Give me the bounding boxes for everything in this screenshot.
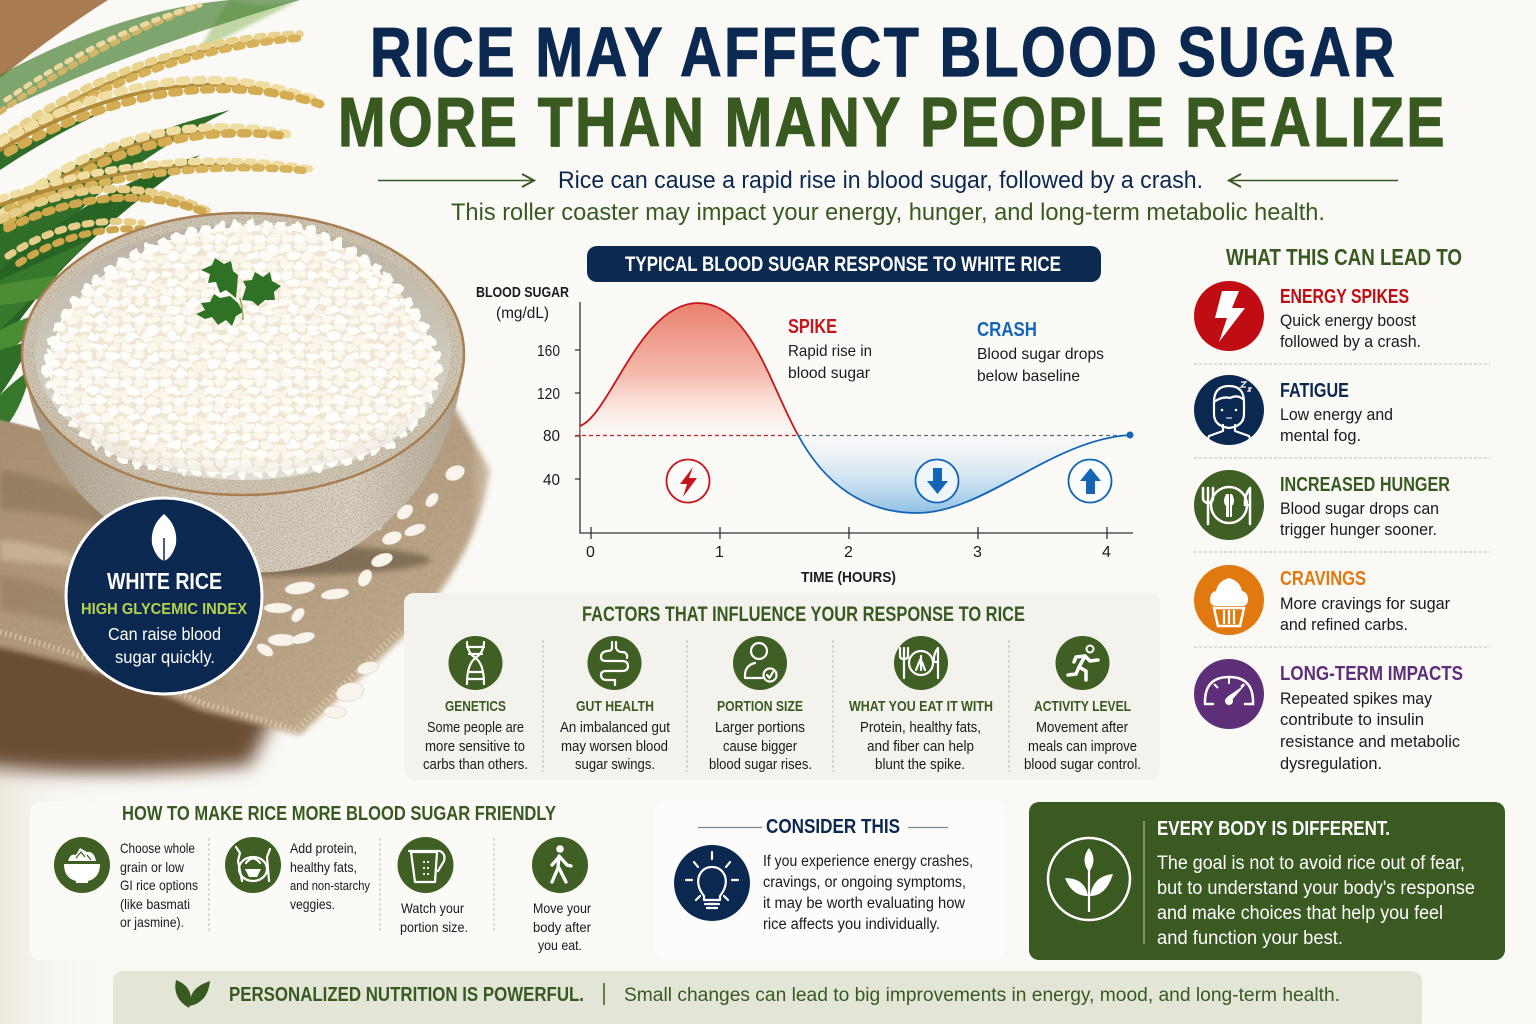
rice stalks and leaves [0, 0, 320, 435]
badge: white rice high glycemic index: HIGH GLYCEMIC INDEX [81, 601, 247, 618]
icon: runner [1056, 636, 1110, 690]
body text: and make choices that help you feel [1157, 903, 1443, 924]
item: cravings: CRAVINGS [1280, 567, 1366, 590]
x axis values [586, 544, 1111, 561]
icon: walking person [532, 837, 588, 893]
tip: whole grain rice: Choose whole [120, 840, 195, 856]
factor: genetics [423, 636, 528, 773]
tip: whole grain rice: (like basmati [120, 896, 190, 912]
icon: cupcake [1194, 565, 1264, 635]
item: energy spikes: followed by a crash. [1280, 332, 1421, 351]
item: increased hunger [1194, 470, 1450, 540]
item: long-term impacts: LONG-TERM IMPACTS [1280, 662, 1463, 685]
bowl shadow [90, 544, 430, 576]
chart title [587, 246, 1101, 282]
banner supporting text: Small changes can lead to big improvements in energy, mood, and long-term health. [624, 985, 1340, 1006]
factor: gut health: GUT HEALTH [576, 698, 654, 715]
crash label: Blood sugar drops [977, 346, 1104, 363]
spike label: Rapid rise in [788, 343, 872, 360]
spike label: SPIKE [788, 316, 837, 338]
tip: portion size [398, 837, 468, 935]
body text: cravings, or ongoing symptoms, [763, 874, 966, 891]
banner bold statement: PERSONALIZED NUTRITION IS POWERFUL. [229, 984, 584, 1006]
crash label: below baseline [977, 368, 1080, 385]
tip: portion size: portion size. [400, 919, 468, 935]
spike area [580, 303, 798, 435]
factor: portion size: PORTION SIZE [717, 698, 803, 715]
icon: meal plate [225, 837, 281, 893]
item: long-term impacts: dysregulation. [1280, 754, 1382, 773]
body text: and function your best. [1157, 928, 1343, 949]
chart title: TYPICAL BLOOD SUGAR RESPONSE TO WHITE RICE [625, 253, 1061, 276]
tip: move your body: body after [533, 919, 591, 935]
factor: genetics: carbs than others. [423, 757, 528, 773]
crash label [977, 319, 1104, 385]
icon: plate and utensils [1194, 470, 1264, 540]
factor: portion size [709, 636, 812, 773]
icon: measuring cup [398, 837, 454, 893]
tip: portion size: Watch your [401, 900, 464, 916]
y axis values: 120 [537, 386, 560, 403]
icon: up arrow in blue ring [1068, 460, 1112, 502]
item: increased hunger: trigger hunger sooner. [1280, 520, 1437, 539]
factor: gut health: sugar swings. [575, 757, 655, 773]
factor: what you eat it with: blunt the spike. [875, 757, 965, 773]
crash label: CRASH [977, 319, 1037, 341]
factor: what you eat it with: and fiber can help [867, 739, 974, 755]
x axis values: 0 [586, 544, 595, 561]
tip: add protein: healthy fats, [290, 859, 357, 875]
icon: dna [448, 636, 502, 690]
icon: plate with vegetables [894, 636, 948, 690]
panel: consider this [654, 802, 1004, 960]
panel: how to make rice more blood sugar friendly [30, 802, 632, 960]
y axis values: 80 [543, 428, 560, 445]
y axis values [537, 343, 560, 489]
panel: every body is different [1029, 802, 1505, 960]
x axis values: 3 [973, 544, 982, 561]
panel: what this can lead to [1194, 244, 1490, 773]
item: increased hunger: INCREASED HUNGER [1280, 473, 1450, 496]
x axis values: 1 [715, 544, 724, 561]
factor: activity level: blood sugar control. [1024, 757, 1141, 773]
icon: plant in circle [1048, 838, 1130, 920]
heading: WHAT THIS CAN LEAD TO [1226, 244, 1462, 270]
x axis values: 4 [1102, 544, 1111, 561]
baseline [575, 434, 1130, 436]
factor: activity level: meals can improve [1028, 739, 1137, 755]
icon: down arrow in blue ring [916, 460, 958, 502]
item: fatigue: Low energy and [1280, 405, 1393, 424]
arrow: left subtitle arrow [378, 174, 534, 187]
factor: genetics: more sensitive to [425, 739, 525, 755]
badge: white rice high glycemic index: WHITE RICE [107, 568, 222, 594]
arrow: right subtitle arrow [1229, 174, 1398, 187]
icon: light bulb [674, 845, 750, 921]
scattered rice grains [255, 462, 467, 718]
subtitle [451, 167, 1325, 226]
tip: move your body [532, 837, 591, 953]
crash area [798, 435, 1130, 513]
tip: whole grain rice: GI rice options [120, 877, 198, 893]
y axis label [476, 284, 569, 322]
factor: activity level: Movement after [1036, 720, 1128, 736]
wooden table bottom [0, 600, 330, 772]
factor: genetics: GENETICS [445, 698, 506, 715]
icon: rice grain [152, 514, 176, 561]
icon: lightning [1194, 281, 1264, 351]
panel: blood sugar chart [470, 246, 1160, 590]
subtitle: Rice can cause a rapid rise in blood sugar, followed by a crash. [558, 167, 1203, 194]
badge: white rice high glycemic index: sugar quickly. [115, 647, 215, 667]
factor: portion size: Larger portions [715, 720, 805, 736]
icon: rice bowl [54, 837, 110, 893]
parsley garnish [196, 258, 281, 326]
y axis label: BLOOD SUGAR [476, 284, 569, 301]
tip: move your body: you eat. [538, 937, 582, 953]
badge: white rice high glycemic index [66, 498, 262, 694]
body text [763, 853, 973, 933]
heading: EVERY BODY IS DIFFERENT. [1157, 818, 1390, 840]
factor: gut health: An imbalanced gut [560, 720, 670, 736]
item: energy spikes: Quick energy boost [1280, 311, 1416, 330]
spike curve [580, 303, 798, 435]
tip: add protein: Add protein, [290, 840, 357, 856]
tip: add protein: veggies. [290, 896, 335, 912]
item: energy spikes: ENERGY SPIKES [1280, 285, 1409, 308]
photo: rice bowl on burlap with rice stalks [0, 0, 530, 772]
item: cravings [1194, 565, 1450, 635]
spike label [788, 316, 872, 382]
axes [575, 302, 1133, 539]
spike label: blood sugar [788, 365, 871, 382]
item: long-term impacts: Repeated spikes may [1280, 689, 1432, 708]
icon: gauge [1194, 659, 1264, 729]
heading: HOW TO MAKE RICE MORE BLOOD SUGAR FRIENDLY [122, 803, 557, 825]
tip: whole grain rice: grain or low [120, 859, 185, 875]
tip: add protein [225, 837, 370, 912]
heading: FACTORS THAT INFLUENCE YOUR RESPONSE TO RICE [582, 603, 1025, 626]
heading: CONSIDER THIS [766, 816, 900, 838]
item: fatigue: mental fog. [1280, 426, 1361, 445]
item: energy spikes [1194, 281, 1421, 351]
item: long-term impacts [1194, 659, 1463, 773]
item: cravings: More cravings for sugar [1280, 594, 1450, 613]
rice mound [47, 225, 438, 473]
factor: what you eat it with: Protein, healthy fats, [860, 720, 981, 736]
factor: portion size: blood sugar rises. [709, 757, 812, 773]
tip: whole grain rice: or jasmine). [120, 914, 184, 930]
factor: gut health: may worsen blood [561, 739, 668, 755]
factor: what you eat it with [849, 636, 993, 773]
rice ears [0, 5, 320, 268]
item: increased hunger: Blood sugar drops can [1280, 499, 1439, 518]
icon: leaves [175, 980, 210, 1008]
y axis values: 160 [537, 343, 560, 360]
wooden table top corner [0, 0, 108, 78]
x axis values: 2 [844, 544, 853, 561]
factor: genetics: Some people are [427, 720, 524, 736]
burlap cloth [0, 404, 492, 738]
item: long-term impacts: resistance and metabolic [1280, 732, 1460, 751]
icon: lightning in red ring [666, 460, 710, 502]
panel: factors that influence your response [404, 593, 1160, 780]
tip: whole grain rice [54, 837, 198, 930]
item: fatigue [1194, 375, 1393, 445]
x axis label: TIME (HOURS) [801, 569, 896, 586]
badge: white rice high glycemic index: Can raise blood [108, 624, 221, 644]
icon: person with check [733, 636, 787, 690]
body text: If you experience energy crashes, [763, 853, 973, 870]
bowl [22, 213, 464, 572]
tip: move your body: Move your [533, 900, 591, 916]
subtitle: This roller coaster may impact your energy, hunger, and long-term metabolic health. [451, 199, 1325, 226]
factor: activity level: ACTIVITY LEVEL [1034, 698, 1131, 715]
factor: activity level [1024, 636, 1141, 773]
item: long-term impacts: contribute to insulin [1280, 710, 1424, 729]
item: fatigue: FATIGUE [1280, 379, 1349, 402]
body text [1157, 853, 1475, 949]
panel: footer banner [113, 971, 1422, 1024]
crash curve [798, 432, 1134, 513]
icon: tired face [1194, 375, 1264, 445]
y axis values: 40 [543, 472, 560, 489]
tip: add protein: and non-starchy [290, 878, 370, 893]
factor: gut health [560, 636, 670, 773]
factor: portion size: cause bigger [723, 739, 797, 755]
title [338, 13, 1447, 161]
body text: rice affects you individually. [763, 916, 940, 933]
body text: but to understand your body's response [1157, 878, 1475, 899]
body text: The goal is not to avoid rice out of fear, [1157, 853, 1465, 874]
y axis label: (mg/dL) [496, 305, 549, 322]
factor: what you eat it with: WHAT YOU EAT IT WITH [849, 698, 993, 715]
icon: intestine [588, 636, 642, 690]
body text: it may be worth evaluating how [763, 895, 966, 912]
item: cravings: and refined carbs. [1280, 615, 1408, 634]
